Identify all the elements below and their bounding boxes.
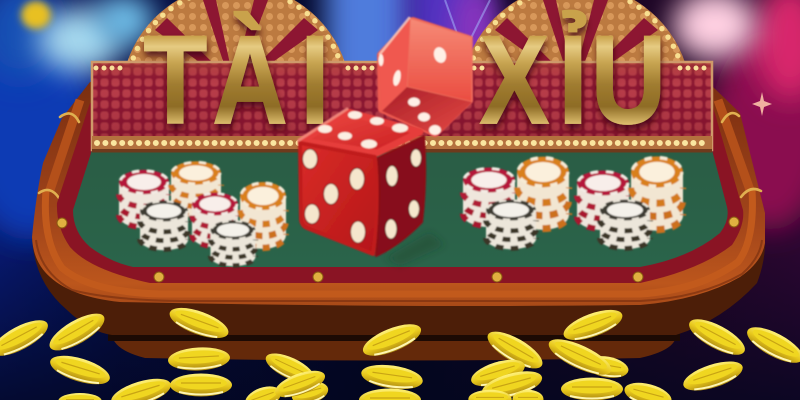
chips: left cluster: [119, 161, 286, 266]
table base: [32, 237, 765, 360]
sparkle: [752, 92, 772, 116]
side pips: [385, 149, 422, 239]
top pips: [318, 111, 408, 148]
gold coins: [0, 302, 800, 400]
title: XỈU: XỈU: [480, 11, 666, 150]
marquee sign: [92, 0, 712, 152]
checked red panel: [92, 62, 712, 150]
large die: [299, 109, 445, 266]
table rim: [32, 82, 765, 306]
chips: right cluster: [463, 156, 683, 249]
green felt: [73, 150, 728, 267]
red felt border: [57, 103, 743, 283]
left arch: [126, 0, 346, 68]
right arch: [466, 0, 686, 68]
front pips: [302, 149, 366, 243]
bottom bulb row: [92, 136, 712, 150]
side gold clips: [39, 113, 761, 198]
top bulbs: [96, 66, 710, 70]
table studs: [57, 217, 739, 282]
title: TÀI: TÀI: [144, 11, 329, 150]
small die: [378, 18, 472, 136]
